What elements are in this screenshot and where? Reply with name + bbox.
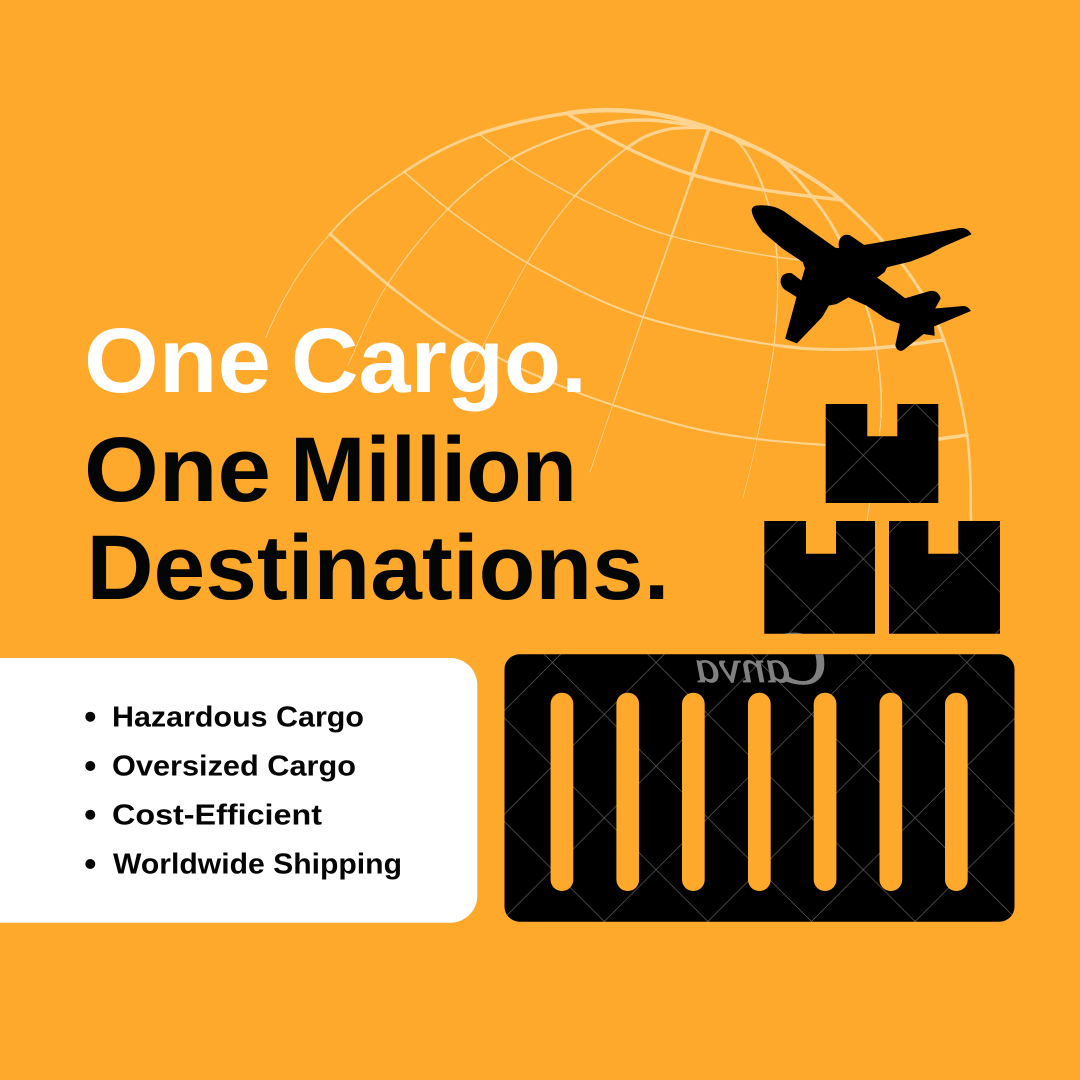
heading lines: One Million Destinations.: Destinations. xyxy=(86,517,670,619)
heading lines: One Million Destinations.: One xyxy=(84,419,271,521)
icon: airplane xyxy=(752,206,971,350)
mirrored watermark xyxy=(696,632,824,685)
panel: service list xyxy=(0,658,477,923)
container body xyxy=(504,654,1014,922)
heading lines: One Million Destinations.: Million xyxy=(290,419,577,521)
heading line: One Cargo.: Cargo. xyxy=(291,310,587,412)
panel background xyxy=(0,658,477,923)
globe wireframe xyxy=(266,110,971,521)
list item: Hazardous Cargo: Hazardous Cargo xyxy=(112,702,364,734)
list item: Cost-Efficient: Cost-Efficient xyxy=(112,800,322,832)
icon: stacked boxes xyxy=(764,404,1000,634)
infographic canvas xyxy=(0,108,1014,923)
heading line: One Cargo. xyxy=(84,310,587,412)
latitude lines xyxy=(330,115,967,445)
icon: shipping container xyxy=(504,654,1014,922)
mirrored watermark: anva xyxy=(695,641,790,692)
longitude lines xyxy=(348,120,881,521)
heading lines: One Million Destinations. xyxy=(84,419,670,619)
mirrored watermark: C xyxy=(779,617,828,701)
heading line: One Cargo.: One xyxy=(84,310,271,412)
top box xyxy=(826,404,938,503)
globe outline xyxy=(266,110,971,520)
bottom left box xyxy=(764,521,875,634)
bottom right box xyxy=(889,521,1000,634)
list item: Oversized Cargo: Oversized Cargo xyxy=(112,751,356,783)
list item: Worldwide Shipping: Worldwide Shipping xyxy=(113,849,402,881)
container vents xyxy=(551,693,968,891)
